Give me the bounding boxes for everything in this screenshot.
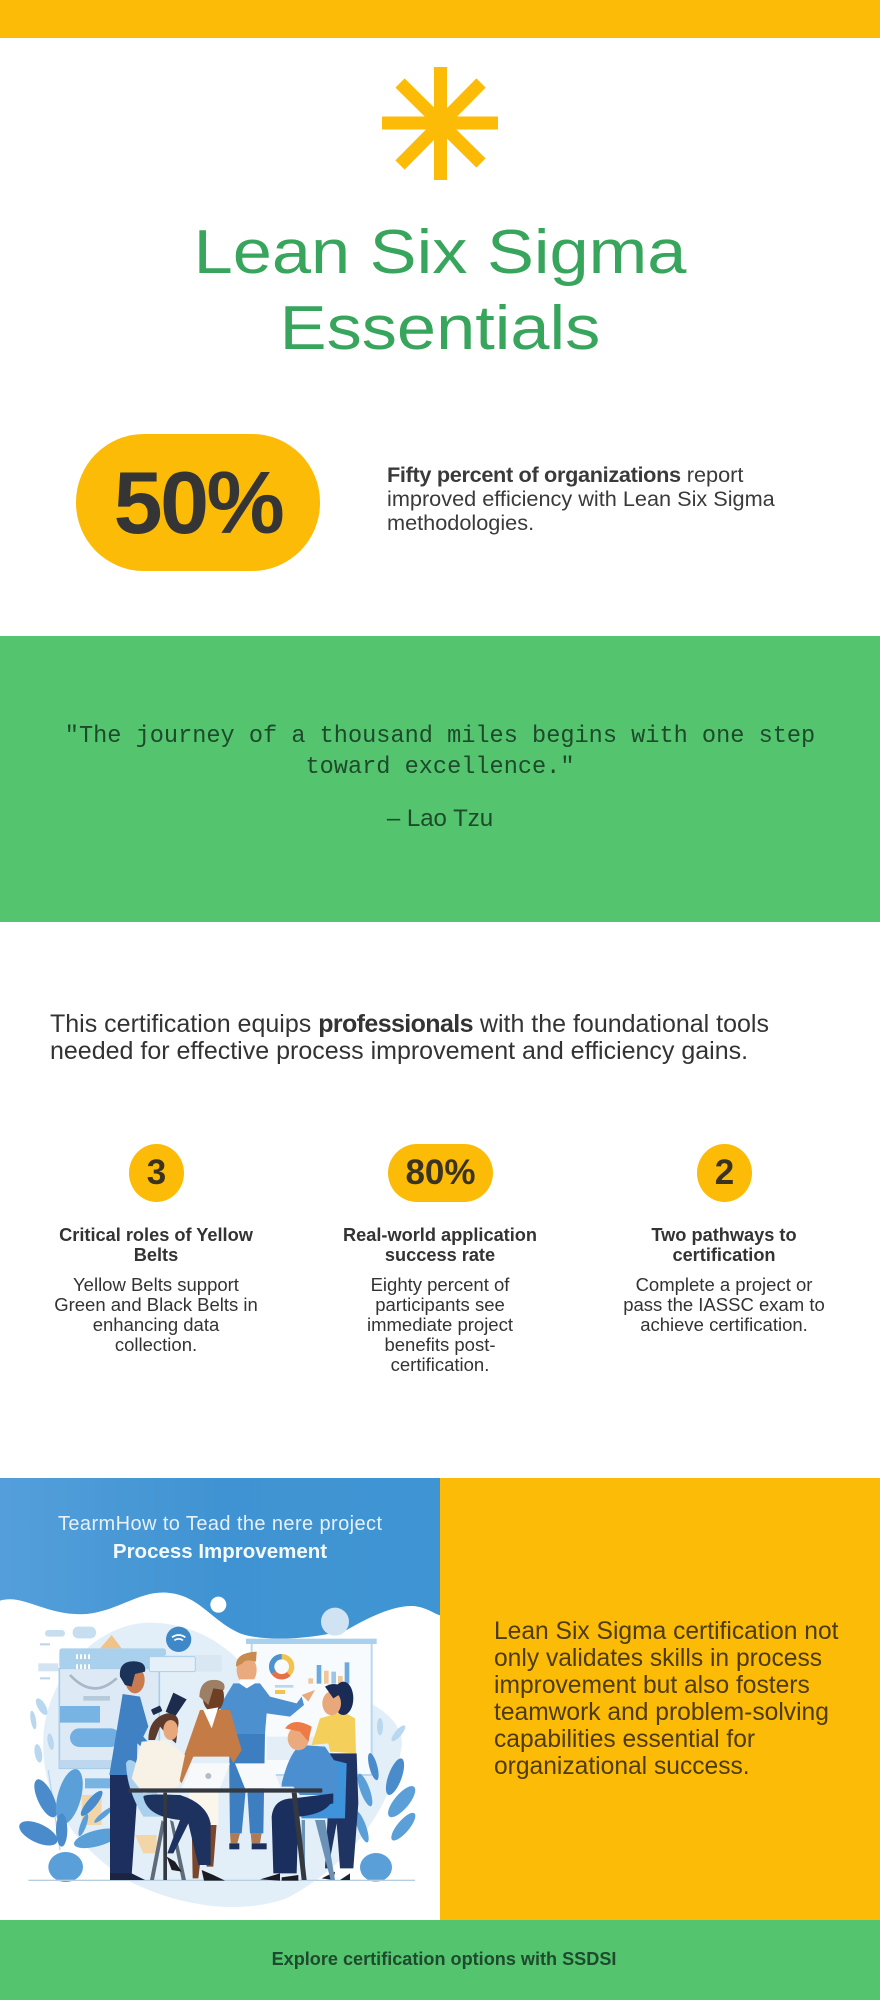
column body: Green and Black Belts in — [54, 1294, 258, 1315]
stat badge: 50%: 50% — [114, 452, 282, 552]
panel: footer call to action — [0, 1920, 880, 2000]
right plants — [352, 1718, 420, 1882]
summary text: only validates skills in process — [494, 1645, 822, 1672]
summary text: organizational success. — [494, 1753, 750, 1780]
person: woman in yellow — [312, 1682, 358, 1880]
column body — [367, 1274, 513, 1375]
column heading: certification — [672, 1245, 776, 1265]
summary text: improvement but also fosters — [494, 1672, 810, 1699]
column body: immediate project — [367, 1314, 513, 1335]
summary text: capabilities essential for — [494, 1726, 755, 1753]
person: standing man — [219, 1652, 315, 1849]
stat description: methodologies. — [387, 510, 534, 535]
column body — [54, 1274, 258, 1355]
quote text — [65, 723, 815, 781]
background blob — [43, 1623, 402, 1907]
column body: benefits post- — [384, 1334, 496, 1355]
illustration heading: TearmHow to Tead the nere project — [58, 1513, 382, 1535]
left plants — [16, 1697, 121, 1882]
intro text — [50, 1010, 769, 1065]
stat description: improved efficiency with Lean Six Sigma — [387, 486, 775, 511]
summary text: Lean Six Sigma certification not — [494, 1618, 838, 1645]
badge: 3: 3 — [147, 1153, 166, 1192]
stat description: Fifty percent of organizations report — [387, 462, 743, 487]
badge: 80% — [388, 1144, 493, 1202]
column body: collection. — [115, 1334, 197, 1355]
intro text: This certification equips professionals with the foundational tools — [50, 1010, 769, 1038]
badge: 2: 2 — [715, 1153, 734, 1192]
intro text: needed for effective process improvement and efficiency gains. — [50, 1037, 748, 1065]
column body: Yellow Belts support — [73, 1274, 239, 1295]
column heading: Belts — [134, 1245, 178, 1265]
top yellow band — [0, 0, 880, 38]
column body: Complete a project or — [636, 1274, 812, 1295]
title: Lean Six Sigma — [194, 218, 686, 287]
column heading — [343, 1225, 537, 1265]
illustration heading — [58, 1513, 382, 1563]
table and laptops — [128, 1763, 322, 1880]
column: pathways — [623, 1144, 825, 1335]
dashboard — [38, 1627, 222, 1853]
stat badge: 50% — [76, 434, 320, 571]
column heading: Critical roles of Yellow — [59, 1225, 253, 1245]
presentation board — [246, 1639, 377, 1775]
person: seated woman — [126, 1713, 225, 1881]
illustration: team collaborating on process improvement — [0, 1478, 440, 1907]
ground line — [28, 1880, 415, 1881]
icon: yellow asterisk — [382, 67, 498, 180]
summary text: teamwork and problem-solving — [494, 1699, 829, 1726]
column: success rate — [343, 1144, 537, 1375]
badge: 2 — [697, 1144, 752, 1202]
column: yellow belt roles — [54, 1144, 258, 1355]
illustration heading: Process Improvement — [113, 1540, 327, 1563]
column heading: success rate — [385, 1245, 495, 1265]
column body: achieve certification. — [640, 1314, 808, 1335]
quote attribution: – Lao Tzu — [387, 805, 493, 832]
column heading: Real-world application — [343, 1225, 537, 1245]
title — [194, 218, 686, 363]
column body: certification. — [391, 1354, 489, 1375]
column body: participants see — [375, 1294, 505, 1315]
column body — [623, 1274, 825, 1335]
quote text: toward excellence." — [305, 754, 574, 781]
column body: pass the IASSC exam to — [623, 1294, 825, 1315]
stat description — [387, 462, 775, 535]
column body: enhancing data — [93, 1314, 219, 1335]
column heading: Two pathways to — [651, 1225, 797, 1245]
panel: quote — [0, 636, 880, 922]
panel: yellow summary — [440, 1478, 880, 1920]
quote text: "The journey of a thousand miles begins with one step — [65, 723, 815, 750]
white wave — [0, 1593, 440, 1937]
footer text: Explore certification options with SSDSI — [272, 1949, 616, 1969]
person: man with tablet — [109, 1661, 187, 1880]
column heading — [651, 1225, 797, 1265]
column heading — [59, 1225, 253, 1265]
badge: 3 — [129, 1144, 184, 1202]
badge: 80%: 80% — [405, 1153, 476, 1192]
person: seated man — [260, 1722, 347, 1881]
summary text — [494, 1618, 838, 1780]
column body: Eighty percent of — [371, 1274, 509, 1295]
person: woman in blazer — [177, 1680, 242, 1878]
title: Essentials — [280, 294, 600, 363]
